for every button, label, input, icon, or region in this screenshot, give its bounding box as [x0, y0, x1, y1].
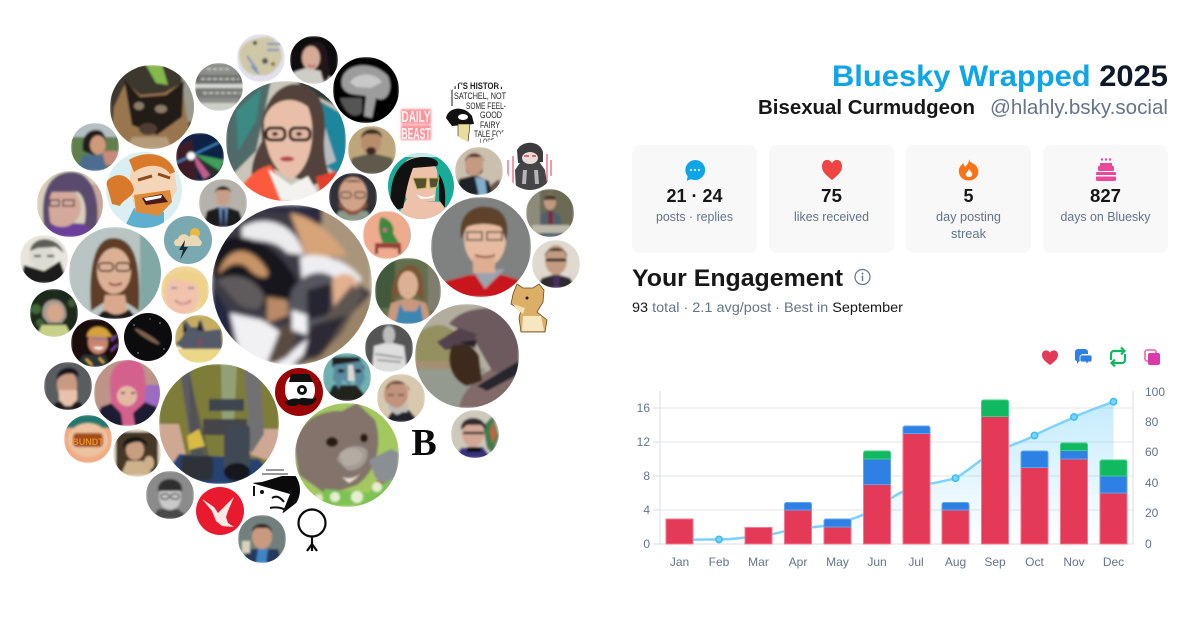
avatar: spectrum light flare [176, 133, 224, 181]
avatar: masked figure [323, 353, 371, 401]
avatar: gray-haired woman in floral [30, 289, 78, 337]
bars: replies [784, 426, 1127, 527]
right axis labels: 100 [1145, 385, 1165, 399]
right axis labels: 0 [1145, 537, 1152, 551]
avatar: grayscale man in cap [146, 471, 194, 519]
avatar: siamese cat [110, 65, 196, 149]
avatar cluster [20, 34, 580, 563]
avatar: man in camo hoodie [415, 304, 522, 408]
avatar: purple hair person [37, 171, 104, 237]
avatar: bundt cake sign: BUNDT [72, 437, 104, 447]
avatar: blue heeler dog [175, 315, 223, 363]
bars: reposts [864, 400, 1127, 476]
avatar: history comic panel: FAIRY [480, 120, 500, 130]
title: Bluesky Wrapped 2025 [832, 60, 1168, 93]
avatar: calico cat (largest) [212, 205, 372, 365]
avatar: blackletter B logo: B [411, 422, 437, 464]
avatar: blonde woman smiling [161, 266, 209, 315]
panel: days on Bluesky: days on Bluesky [1060, 209, 1151, 224]
panel: day posting streak [906, 145, 1031, 253]
heading: your engagement: Your Engagement [632, 265, 843, 292]
month labels: Aug [945, 555, 966, 569]
panel: day posting streak: day posting [936, 209, 1001, 224]
icon: flame [959, 159, 978, 180]
chart legend [1042, 348, 1160, 366]
avatar: man in red sweater [431, 197, 531, 297]
avatar: bearded man arms crossed [348, 126, 396, 174]
month labels: Jan [670, 555, 689, 569]
avatar: man in blue shirt [238, 515, 286, 563]
avatar: man in dark jacket [455, 147, 503, 195]
avatar: history comic panel: GOOD [480, 110, 502, 120]
panel: day posting streak: streak [951, 226, 986, 241]
avatar: bundt cake sign [64, 415, 112, 463]
avatar: anime figure [506, 142, 554, 190]
cumulative points [716, 398, 1117, 543]
avatar: camera gear on chest [159, 364, 279, 484]
avatar: curly-haired woman in frame [113, 429, 161, 477]
avatar: cartoon man with sunglasses [388, 153, 454, 219]
avatar: wombat with shovel [295, 403, 399, 507]
month labels: Dec [1103, 555, 1124, 569]
left axis labels: 4 [643, 503, 650, 517]
panel: likes received [769, 145, 894, 253]
avatar: grey engraved sign [195, 63, 243, 111]
month labels: Feb [709, 555, 730, 569]
avatar: brain scan [333, 57, 399, 123]
avatar: person with glasses and plant [451, 410, 499, 458]
avatar: woman dark background [290, 36, 338, 84]
avatar: history comic panel: IT'S HISTORY [454, 81, 504, 91]
panel: posts and replies: posts · replies [656, 209, 733, 224]
panel: posts and replies [632, 145, 757, 253]
left axis labels [637, 401, 650, 551]
avatar: Daily Beast logo: DAILY [402, 109, 431, 126]
avatar: Daily Beast logo: BEAST [401, 126, 431, 143]
avatar: woman covering mouth [44, 362, 92, 410]
panel: likes received: likes received [794, 209, 869, 224]
avatar: young man in suit [199, 179, 247, 227]
chart gridlines [660, 408, 1133, 510]
avatar: history comic panel [446, 82, 506, 143]
month labels: May [826, 555, 849, 569]
right axis labels: 20 [1145, 506, 1159, 520]
avatar: woman outdoors with denim [71, 123, 119, 171]
icon: birthday cake [1096, 158, 1116, 181]
month labels: Sep [984, 555, 1006, 569]
left axis labels: 12 [637, 435, 650, 449]
display name: Bisexual Curmudgeon [758, 97, 975, 119]
right axis labels: 80 [1145, 415, 1159, 429]
month labels [670, 555, 1124, 569]
cumulative line [680, 402, 1114, 540]
month labels: Apr [789, 555, 807, 569]
icon: info [855, 270, 870, 284]
avatar: black and white woman with beanie [20, 235, 68, 283]
icon: legend replies [1075, 349, 1092, 365]
avatar: plant tattoo [363, 211, 412, 259]
avatar: history comic panel: SATCHEL, NOT [454, 91, 506, 101]
icon: legend heart [1042, 350, 1058, 365]
icon: legend quotes [1145, 350, 1160, 365]
left axis labels: 8 [643, 469, 650, 483]
avatar: angry red-bearded cartoon [106, 152, 182, 228]
avatar: man seated in suit [526, 189, 574, 237]
panel: day posting streak: 5 [963, 186, 974, 206]
handle: @hlahly.bsky.social [990, 97, 1168, 119]
avatar: Daily Beast logo [401, 109, 431, 143]
avatar: woman in pink balaclava [94, 359, 161, 426]
panel: likes received: 75 [821, 186, 842, 206]
icon: legend reposts [1111, 348, 1125, 366]
left axis labels: 16 [637, 401, 650, 415]
icon: chat bubble [685, 160, 705, 181]
avatar: woman with glasses and brown hair [69, 227, 165, 319]
avatar: rock sample [237, 34, 285, 82]
month labels: Nov [1063, 555, 1085, 569]
panel: posts and replies: 21 · 24 [666, 186, 722, 206]
avatar: history comic panel: LOSERS [480, 137, 502, 147]
avatar: smiling man with glasses [532, 240, 580, 288]
avatar: black and white comic face [252, 466, 300, 514]
panel: days on Bluesky: 827 [1090, 186, 1121, 206]
avatar: red eagle logo [196, 487, 244, 535]
left axis labels: 0 [643, 537, 650, 551]
month labels: Jun [867, 555, 887, 569]
avatar: older man in black and white [365, 324, 413, 372]
avatar: woman in blue tank top [375, 258, 441, 324]
avatar: man in yellow cap [71, 319, 119, 367]
cumulative area [680, 402, 1114, 544]
avatar: bearded older man [377, 374, 425, 422]
avatar: woman with dark glasses [226, 81, 346, 203]
month labels: Oct [1025, 555, 1044, 569]
right axis labels: 40 [1145, 476, 1159, 490]
avatar: stick figure [298, 510, 326, 551]
avatar: mustached mascot logo [275, 368, 323, 416]
right axis labels: 60 [1145, 445, 1159, 459]
month labels: Jul [908, 555, 924, 569]
avatar: galaxy [124, 313, 172, 361]
avatar: bearded man with glasses [329, 173, 377, 221]
avatar: cartoon bear character [511, 284, 547, 332]
month labels: Mar [748, 555, 769, 569]
avatar: history comic panel: TALE FOR [474, 129, 506, 139]
avatar: history comic panel: SOME FEEL- [466, 101, 506, 111]
icon: heart [822, 160, 842, 180]
avatar: weather storm cloud [164, 216, 212, 264]
right axis labels [1145, 385, 1165, 551]
bars: likes [666, 416, 1127, 544]
stacked bar chart with cumulative line [637, 385, 1165, 569]
panel: days on Bluesky [1043, 145, 1168, 253]
engagement summary: 93 total · 2.1 avg/post · Best in September [632, 299, 903, 315]
